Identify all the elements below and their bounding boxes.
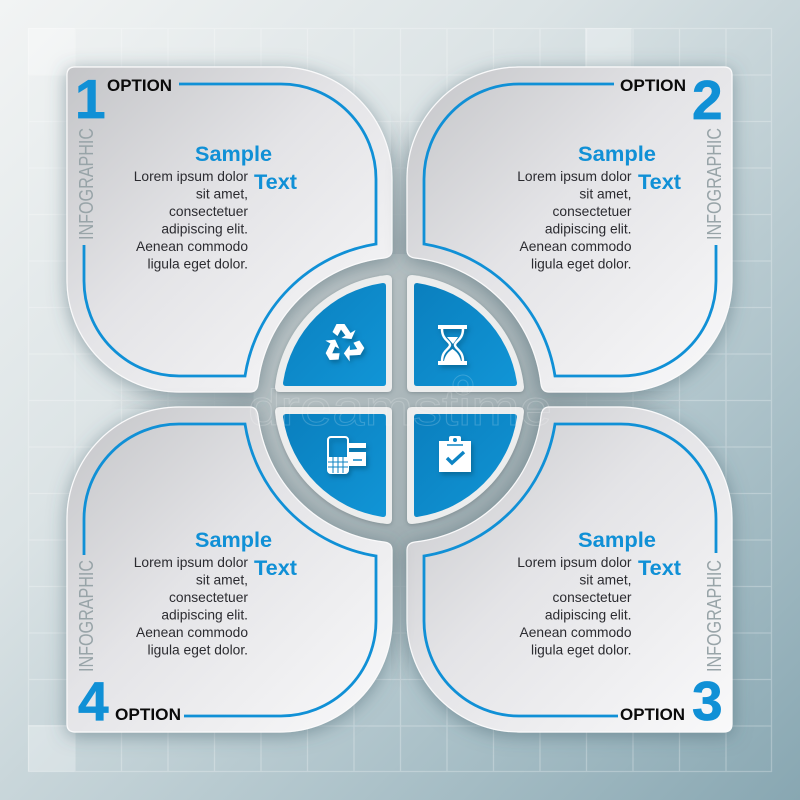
heading 4: Text [254,557,297,580]
option label 4: OPTION [115,705,181,724]
heading 1 [195,143,297,194]
heading 1: Text [254,171,297,194]
body text 1: sit amet, [196,186,248,202]
watermark: dreamstime [248,380,552,436]
quadrant: top left [275,275,392,392]
panel 2 [407,67,732,392]
option label 1: OPTION [107,76,172,95]
body text 4: Lorem ipsum dolor [134,555,248,570]
number 1: 1 [75,68,106,130]
body text 3: sit amet, [579,572,632,588]
body text 4: consectetuer [169,590,248,605]
panel 4 [67,407,392,732]
heading 3: Sample [578,529,656,552]
body text 2 [517,169,632,272]
body text 3: consectetuer [552,590,632,605]
body text 2: adipiscing elit. [545,222,632,236]
heading 4: Sample [195,529,272,552]
body text 4: Aenean commodo [136,625,248,640]
body text 4: adipiscing elit. [161,608,248,622]
body text 1: Lorem ipsum dolor [134,169,248,184]
icon: clipboard [439,436,471,472]
heading 3: Text [638,557,681,580]
body text 3: Lorem ipsum dolor [517,555,632,570]
body text 3: adipiscing elit. [545,608,632,622]
body text 1: Aenean commodo [136,239,248,254]
body text 1: consectetuer [169,204,248,219]
vertical label 3: INFOGRAPHIC [704,560,726,672]
body text 1 [134,169,248,272]
body text 3 [517,555,632,658]
vertical label 1: INFOGRAPHIC [76,128,98,240]
quadrant: top right [407,275,524,392]
vertical label 4: INFOGRAPHIC [76,560,98,672]
icon: phone and card [328,437,366,473]
body text 4 [134,555,248,658]
body text 2: consectetuer [552,204,632,219]
heading 4 [195,529,297,580]
heading 2: Text [638,171,681,194]
vertical label 2: INFOGRAPHIC [704,128,726,240]
option label 3: OPTION [620,705,685,724]
quadrant: bottom left [275,407,392,524]
heading 3 [578,529,681,580]
body text 2: Aenean commodo [520,239,632,254]
icon: recycle [320,324,366,364]
body text 2: sit amet, [579,186,632,202]
body text 4: sit amet, [196,572,248,588]
body text 3: Aenean commodo [520,625,632,640]
number 4: 4 [78,670,109,732]
option label 2: OPTION [620,76,686,95]
body text 2: ligula eget dolor. [531,256,632,272]
body text 1: adipiscing elit. [161,222,248,236]
number 3: 3 [692,670,723,732]
body text 2: Lorem ipsum dolor [517,169,632,184]
panel 1 [67,67,392,392]
icon: hourglass [438,325,467,365]
center ring and cross gap [110,110,690,690]
body text 3: ligula eget dolor. [531,642,632,658]
heading 2 [578,143,681,194]
panel 3 [407,407,732,732]
number 2: 2 [692,69,723,131]
quadrant: bottom right [407,407,524,524]
body text 4: ligula eget dolor. [148,642,248,658]
heading 2: Sample [578,143,656,166]
body text 1: ligula eget dolor. [148,256,248,272]
heading 1: Sample [195,143,272,166]
